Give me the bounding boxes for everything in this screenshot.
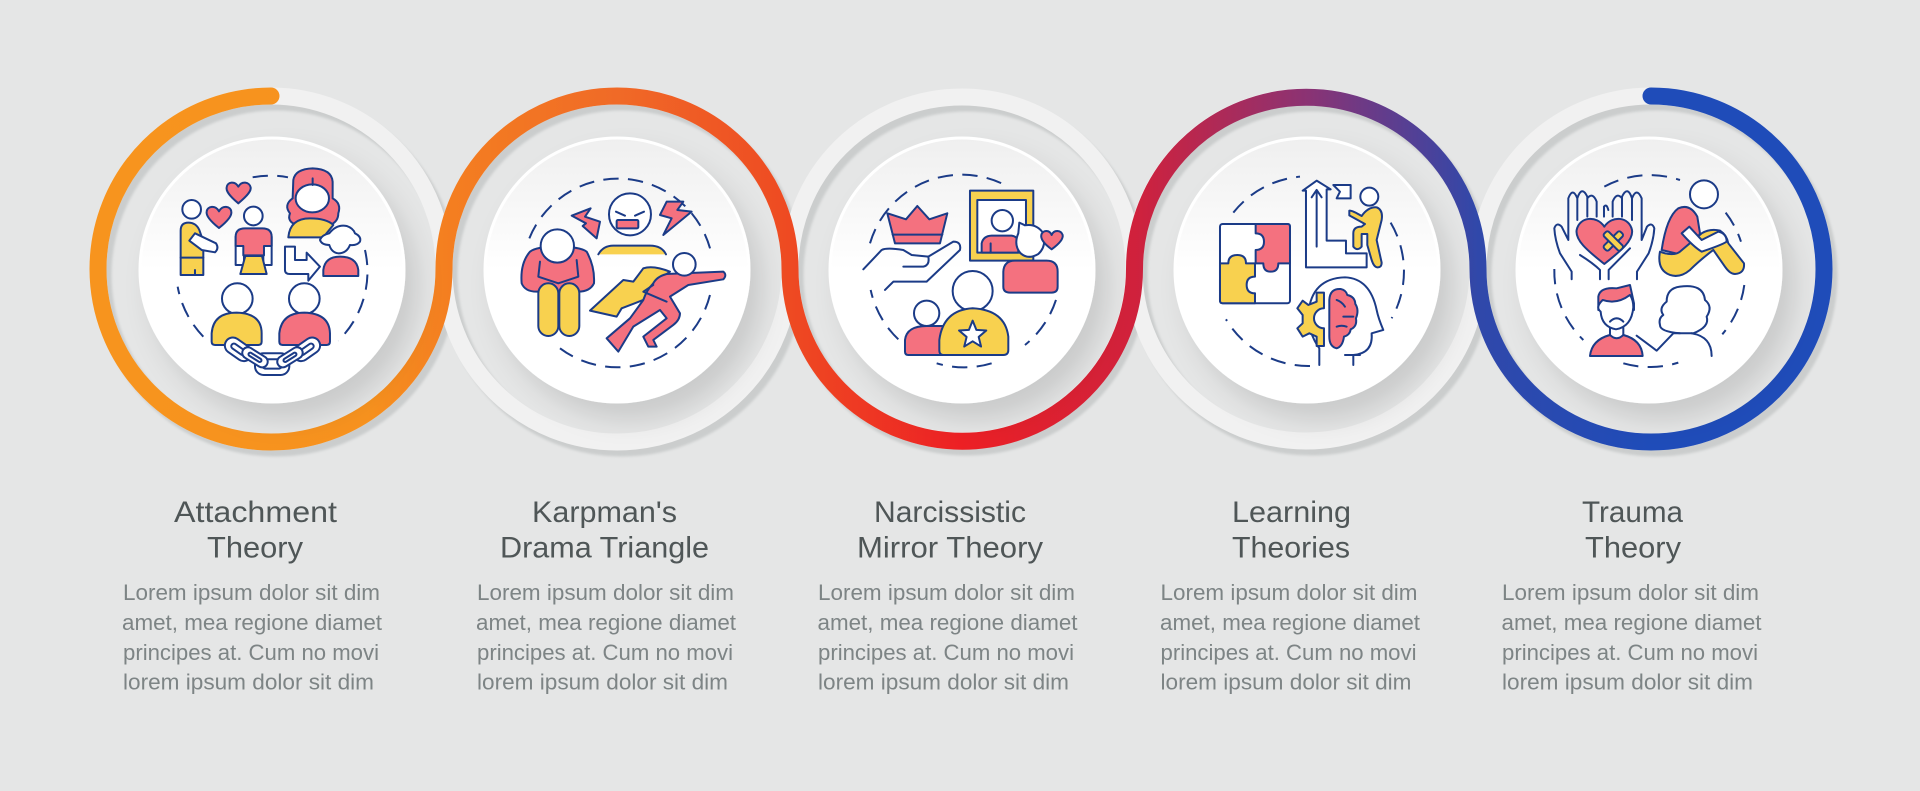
heading: Karpman's <box>532 496 677 529</box>
light base rings <box>98 96 1824 442</box>
text block: amet, mea regione diamet <box>1160 610 1421 635</box>
disc <box>1175 138 1439 402</box>
text block: amet, mea regione diamet <box>818 610 1078 635</box>
icon: drama triangle <box>521 179 725 367</box>
heading: Theory <box>1585 532 1681 564</box>
heading <box>174 496 338 564</box>
heading <box>1582 496 1683 564</box>
heading: Narcissistic <box>874 496 1026 529</box>
text block: lorem ipsum dolor sit dim <box>1502 670 1753 694</box>
panel: Attachment Theory <box>122 138 404 694</box>
text block: principes at. Cum no movi <box>123 640 379 665</box>
panel: Trauma Theory <box>1502 138 1781 694</box>
heading <box>1232 496 1351 564</box>
text block <box>476 580 737 694</box>
heading: Attachment <box>174 496 338 529</box>
icon: trauma <box>1554 175 1744 367</box>
text block: principes at. Cum no movi <box>477 640 733 665</box>
heading: Drama Triangle <box>500 532 709 564</box>
heading: Theory <box>207 532 303 564</box>
text block <box>122 580 383 694</box>
disc <box>485 138 749 402</box>
gradient ribbon connector <box>98 96 1824 442</box>
text block <box>818 580 1078 694</box>
text block <box>1502 580 1762 694</box>
icon: attachment relationships <box>178 168 367 375</box>
heading <box>500 496 709 564</box>
text block: principes at. Cum no movi <box>1160 640 1416 665</box>
icon: narcissistic mirror <box>863 175 1063 367</box>
heading <box>857 496 1043 564</box>
text block: amet, mea regione diamet <box>122 610 383 635</box>
ring shadows <box>103 102 1829 448</box>
text block: Lorem ipsum dolor sit dim <box>818 580 1075 605</box>
panel: Learning Theories <box>1160 138 1439 694</box>
text block: Lorem ipsum dolor sit dim <box>123 580 380 605</box>
heading: Learning <box>1232 496 1351 529</box>
panel: Karpman's Drama Triangle <box>476 138 749 694</box>
text block: Lorem ipsum dolor sit dim <box>1160 580 1418 605</box>
disc <box>140 138 404 402</box>
text block <box>1160 580 1421 694</box>
icon: learning <box>1220 177 1404 366</box>
disc <box>1517 138 1781 402</box>
text block: Lorem ipsum dolor sit dim <box>477 580 734 605</box>
text block: amet, mea regione diamet <box>476 610 737 635</box>
text block: lorem ipsum dolor sit dim <box>818 670 1069 694</box>
text block: Lorem ipsum dolor sit dim <box>1502 580 1759 605</box>
panel: Narcissistic Mirror Theory <box>818 138 1094 694</box>
heading: Trauma <box>1582 496 1683 529</box>
heading: Theories <box>1232 532 1350 564</box>
text block: lorem ipsum dolor sit dim <box>123 670 374 694</box>
text block: lorem ipsum dolor sit dim <box>477 670 728 694</box>
disc <box>830 138 1094 402</box>
text block: lorem ipsum dolor sit dim <box>1160 670 1412 694</box>
text block: amet, mea regione diamet <box>1502 610 1762 635</box>
text block: principes at. Cum no movi <box>1502 640 1758 665</box>
text block: principes at. Cum no movi <box>818 640 1074 665</box>
heading: Mirror Theory <box>857 532 1043 564</box>
